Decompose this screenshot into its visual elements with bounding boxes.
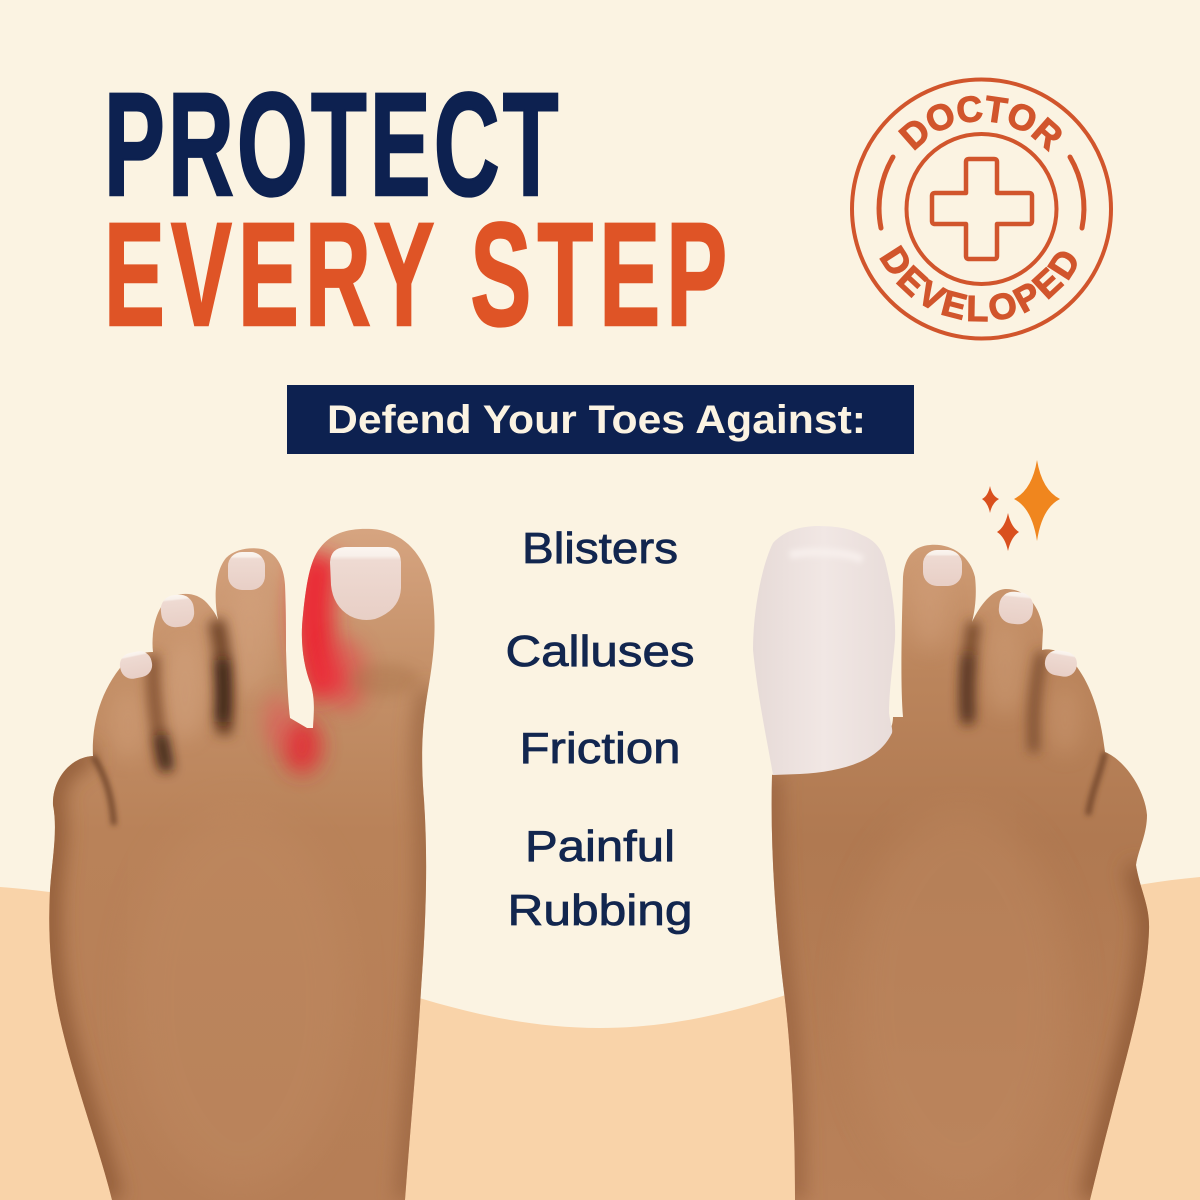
banner: defend your toes against: Defend Your Toes Against: [327,398,866,442]
right foot: toe with protector cap [753,526,1149,1200]
second toenail [923,550,962,586]
edge shading [772,775,795,1200]
toe gaps [216,620,225,735]
title line: protect: PROTECT [104,62,558,226]
list of toe problems: Painful [525,822,675,871]
left foot: irritated toe [49,529,435,1200]
icon: sparkles [982,460,1060,551]
central highlight [850,810,1070,1190]
gel toe cap [753,526,895,775]
title [104,62,727,356]
cap top highlight [790,552,862,560]
edge shading [49,756,112,1200]
third toenail [159,593,196,629]
toe tan mark [350,666,416,694]
list of toe problems: Rubbing [508,886,692,935]
redness [313,555,330,695]
badge: doctor developed [850,78,1113,340]
toe gaps [967,622,974,725]
central highlight [130,810,350,1190]
list of toe problems [506,524,694,935]
fourth toenail [1043,648,1079,679]
third toenail [997,590,1035,626]
large orange sparkle [1014,460,1060,541]
title line: every step: EVERY STEP [104,192,727,356]
list of toe problems: Friction [520,724,680,773]
peach wave at bottom [0,877,1200,1200]
list of toe problems: Calluses [506,627,694,676]
fourth toenail [118,649,154,681]
badge text [879,95,1077,322]
banner: defend your toes against [287,385,914,454]
badge text: DEVELOPED [879,244,1077,322]
second toenail [228,552,265,590]
medium red sparkle [997,513,1019,551]
list of toe problems: Blisters [522,524,678,573]
badge text: DOCTOR [898,95,1062,152]
icon: medical cross [932,159,1032,259]
big toenail [330,547,401,620]
small red sparkle [982,486,999,513]
